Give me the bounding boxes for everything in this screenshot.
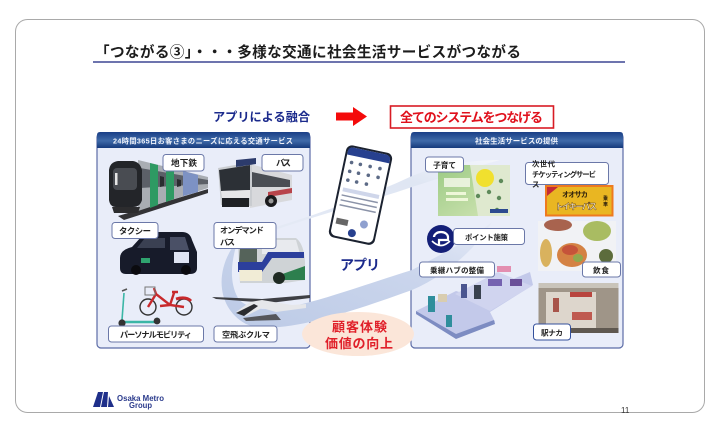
logo: Osaka Metro Group: Osaka Metro <box>117 394 164 403</box>
label: point program: ポイント施策 <box>465 233 509 242</box>
title: 「つながる③」・・・多様な交通に社会生活サービスがつながる <box>95 43 521 61</box>
picture: subway train <box>109 160 208 220</box>
label: food and drink <box>582 262 620 277</box>
panel: lifestyle services background <box>411 133 623 348</box>
heading: app fusion: アプリによる融合 <box>213 109 310 124</box>
picture: bus <box>218 158 292 208</box>
label: on-demand bus: オンデマンド <box>220 225 264 235</box>
label: app: アプリ <box>340 257 380 273</box>
callout: customer experience value <box>302 312 414 356</box>
picture: food <box>538 219 616 271</box>
label: subway: 地下鉄 <box>171 157 197 168</box>
callout: customer experience value: 顧客体験 <box>332 320 387 334</box>
label: next-generation ticketing: ス <box>532 180 539 189</box>
label: bus: バス <box>276 158 291 168</box>
panel heading: transport services <box>97 132 310 148</box>
label: flying car <box>214 326 277 342</box>
label: on-demand bus: バス <box>220 238 235 247</box>
label: flying car: 空飛ぶクルマ <box>222 330 270 340</box>
panel heading: lifestyle services <box>411 132 623 148</box>
logo: Osaka Metro Group: Group <box>129 401 152 410</box>
page number: 11 <box>621 406 630 415</box>
label: on-demand bus <box>214 222 276 248</box>
label: food and drink: 飲食 <box>593 265 609 275</box>
label: point program <box>454 228 524 244</box>
icon: point program <box>427 225 455 253</box>
swoosh: lower band <box>222 222 492 328</box>
label: personal mobility <box>108 326 204 342</box>
label: next-generation ticketing <box>526 160 608 189</box>
callout: customer experience value: 価値の向上 <box>325 336 393 351</box>
label: childcare: 子育て <box>433 160 456 170</box>
picture: flying car <box>212 295 310 321</box>
label: childcare <box>426 157 464 172</box>
label: transfer hub <box>420 262 494 277</box>
panel: transport services background <box>97 133 310 348</box>
picture: Osaka ticket pass: トイキーパス <box>555 202 597 212</box>
label: bus <box>262 154 303 171</box>
label: station retail: 駅ナカ <box>541 328 563 338</box>
picture: taxi <box>120 232 197 275</box>
picture: on-demand bus <box>238 238 305 284</box>
icon: smartphone app <box>328 144 393 246</box>
label: transfer hub: 乗継ハブの整備 <box>430 265 484 275</box>
label: next-generation ticketing: 次世代 <box>532 160 556 168</box>
picture: electric scooter <box>118 289 160 327</box>
label: subway <box>163 154 204 171</box>
callout: connect all systems <box>390 106 554 128</box>
picture: transfer hub <box>416 266 533 339</box>
label: station retail <box>534 324 570 340</box>
swoosh: upper band <box>240 160 500 240</box>
callout: connect all systems: 全てのシステムをつなげる <box>400 110 543 125</box>
picture: Osaka ticket pass: 車 <box>603 201 608 208</box>
logo: Osaka Metro Group <box>93 392 164 410</box>
picture: childcare flyer <box>438 165 510 216</box>
picture: Osaka ticket pass <box>545 185 614 216</box>
picture: station shop <box>538 283 618 333</box>
panel heading: lifestyle services: 社会生活サービスの提供 <box>475 136 558 146</box>
label: next-generation ticketing: チケッティングサービ <box>532 170 596 179</box>
label: taxi <box>112 222 158 238</box>
picture: Osaka ticket pass: オオサカ <box>562 190 588 199</box>
panel heading: transport services: 24時間365日お客さまのニーズに応える交通サービス <box>113 136 293 146</box>
label: taxi: タクシー <box>119 226 151 236</box>
picture: rental bicycle <box>140 287 192 315</box>
label: personal mobility: パーソナルモビリティ <box>120 330 192 340</box>
arrow: red right <box>336 107 367 126</box>
picture: Osaka ticket pass: 乗 <box>603 195 608 202</box>
